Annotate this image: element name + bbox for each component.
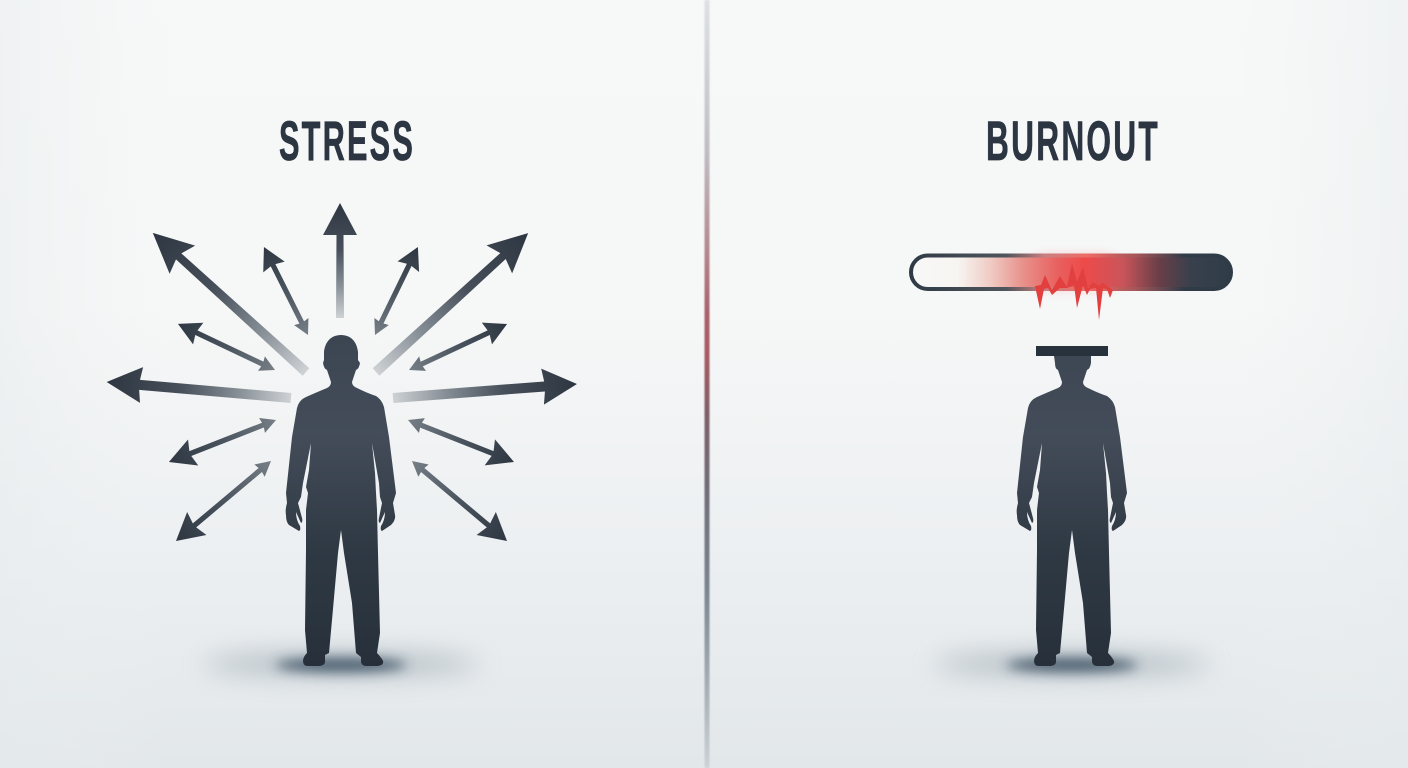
arrow: right	[392, 366, 578, 416]
heading: stress: STRESS	[279, 109, 415, 172]
arrow: upper right small	[364, 242, 429, 340]
arrow: left upper small	[173, 313, 280, 381]
arrow: right lower small	[403, 407, 519, 475]
panel: stress	[105, 109, 578, 675]
center divider	[704, 0, 710, 768]
heading: burnout: BURNOUT	[986, 109, 1160, 172]
ground shadow: stress	[203, 653, 479, 675]
arrow: right upper small	[404, 313, 512, 381]
figure: stressed person	[286, 335, 396, 666]
battery bar with red surge	[911, 254, 1231, 320]
arrow: upper left small	[253, 242, 319, 340]
arrow: left	[105, 364, 293, 416]
arrow: up	[323, 203, 357, 318]
figure: burned out person	[1017, 356, 1127, 666]
panel: burnout	[911, 109, 1231, 675]
bar gauge	[911, 256, 1231, 289]
ground shadow: burnout	[934, 653, 1210, 675]
arrow: bottom right small	[402, 450, 517, 552]
arrow: left lower small	[164, 407, 281, 475]
arrow: upper right	[363, 219, 541, 386]
bar glow	[1030, 254, 1120, 290]
arrow: bottom left small	[166, 450, 281, 552]
flat bar on head	[1036, 346, 1108, 356]
waveform spikes	[1035, 263, 1113, 320]
arrow: upper left	[140, 219, 319, 386]
radiating arrows	[105, 203, 578, 552]
